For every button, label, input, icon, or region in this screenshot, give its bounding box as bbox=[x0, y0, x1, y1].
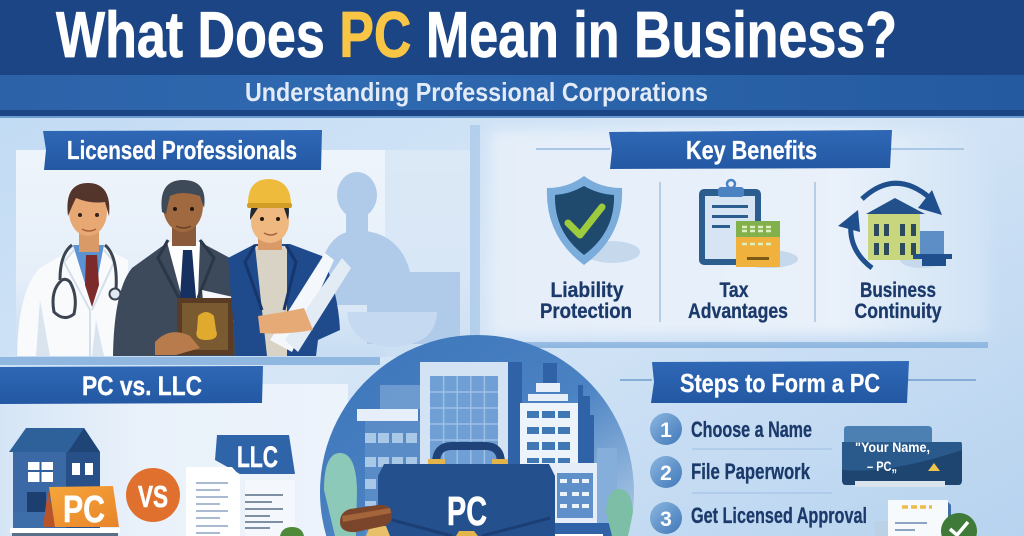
icon: name folder: "Your Name, bbox=[855, 439, 930, 455]
step 3: 3 bbox=[660, 508, 672, 531]
icon: vs badge bbox=[126, 468, 180, 522]
silhouette of background professional bbox=[322, 172, 460, 347]
divider: right bbox=[520, 342, 988, 348]
icon: name folder bbox=[842, 426, 962, 487]
heading: key benefits: Key Benefits bbox=[686, 135, 817, 165]
heading: pc vs llc bbox=[0, 366, 263, 404]
heading: key benefits bbox=[609, 130, 892, 169]
buildings bbox=[357, 362, 617, 536]
icon: llc documents: LLC bbox=[237, 441, 278, 474]
label: business continuity bbox=[854, 279, 942, 323]
icon: llc documents bbox=[186, 435, 304, 536]
panel: pc vs llc bbox=[0, 366, 348, 536]
figure: doctor bbox=[17, 183, 128, 356]
heading: steps: Steps to Form a PC bbox=[680, 368, 880, 398]
trees bbox=[324, 453, 357, 536]
title: What Does PC Mean in Business? bbox=[56, 0, 897, 71]
icon: name folder: – PC„ bbox=[867, 458, 897, 474]
figure: engineer bbox=[228, 179, 351, 356]
icon: gavel bbox=[340, 505, 392, 536]
step 1: Choose a Name bbox=[691, 417, 812, 442]
step 3 bbox=[650, 502, 867, 534]
icon: approved documents bbox=[875, 500, 977, 536]
step 2 bbox=[650, 456, 811, 488]
briefcase: PC bbox=[447, 488, 487, 534]
subtitle: Understanding Professional Corporations bbox=[245, 77, 708, 107]
icon: shield bbox=[547, 176, 640, 265]
step 3: Get Licensed Approval bbox=[691, 503, 867, 528]
step 1 bbox=[650, 413, 812, 445]
header banner bbox=[0, 0, 1024, 118]
center illustration: city and briefcase bbox=[320, 335, 634, 536]
panel: key benefits bbox=[490, 130, 990, 335]
divider: left bbox=[0, 357, 380, 365]
heading: pc vs llc: PC vs. LLC bbox=[82, 371, 202, 401]
icon: vs badge: VS bbox=[138, 479, 168, 514]
icon: clipboard with tax chart bbox=[699, 180, 798, 268]
heading: steps bbox=[651, 361, 909, 403]
label: business continuity: Continuity bbox=[854, 300, 942, 323]
briefcase bbox=[378, 446, 555, 536]
label: liability protection: Liability bbox=[550, 279, 624, 302]
heading: licensed professionals bbox=[43, 130, 322, 170]
label: tax advantages: Advantages bbox=[688, 300, 788, 323]
panel: steps to form a pc bbox=[620, 361, 977, 536]
step 2: File Paperwork bbox=[691, 459, 811, 484]
pc tag: PC bbox=[63, 489, 105, 531]
label: liability protection: Protection bbox=[540, 300, 632, 323]
step 1: 1 bbox=[660, 419, 672, 442]
label: liability protection bbox=[540, 279, 632, 323]
step 2: 2 bbox=[660, 462, 672, 485]
icon: pc house bbox=[9, 428, 120, 536]
heading: licensed professionals: Licensed Professionals bbox=[67, 135, 297, 165]
icon: building with cycle arrows bbox=[838, 183, 952, 268]
label: tax advantages: Tax bbox=[720, 279, 749, 302]
figure: lawyer bbox=[113, 180, 245, 356]
label: business continuity: Business bbox=[860, 279, 936, 302]
panel: licensed professionals bbox=[16, 125, 480, 357]
label: tax advantages bbox=[688, 279, 788, 323]
